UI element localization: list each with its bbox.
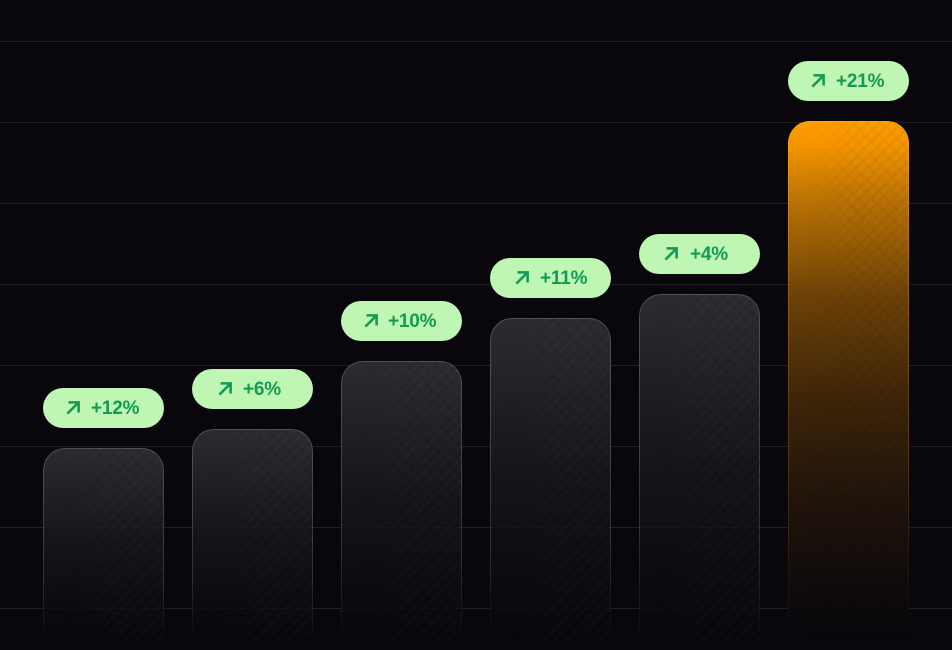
- bar 4: [490, 318, 611, 640]
- bar group: +4%: [639, 234, 760, 626]
- badge: +10%: [341, 301, 462, 341]
- badge: +21%: [788, 61, 909, 101]
- badge: +6%: +6%: [243, 379, 281, 400]
- badge: +4%: +4%: [690, 244, 728, 265]
- badge: +4%: [639, 234, 760, 274]
- badge: +11%: [490, 258, 611, 298]
- bar 1: [43, 448, 164, 640]
- badge: +21%: +21%: [836, 71, 884, 92]
- bar group: +11%: [490, 258, 611, 628]
- badge: +12%: +12%: [91, 398, 139, 419]
- badge: +12%: [43, 388, 164, 428]
- bar group: +6%: [192, 369, 313, 630]
- bar group: +12%: [43, 388, 164, 630]
- bar 2: [192, 429, 313, 640]
- badge: +6%: [192, 369, 313, 409]
- bar 5: [639, 294, 760, 640]
- bar group: +21% (highlight): [788, 61, 909, 614]
- badge: +11%: +11%: [540, 268, 587, 289]
- bar group: +10%: [341, 301, 462, 628]
- bar 3: [341, 361, 462, 640]
- badge: +10%: +10%: [388, 311, 436, 332]
- bar 6: orange: [788, 121, 909, 640]
